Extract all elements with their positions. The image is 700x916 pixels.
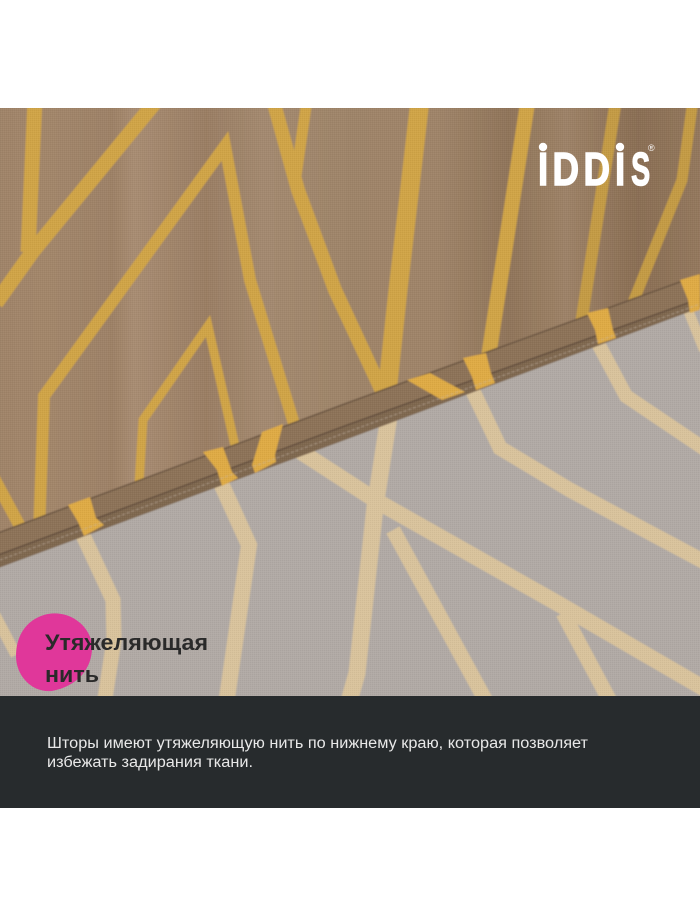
stitching <box>0 304 700 560</box>
golden pattern on brown fabric <box>0 100 693 560</box>
infographic canvas <box>0 108 700 808</box>
heading: нить <box>45 662 99 687</box>
logo: IDDIS: ® <box>648 143 655 153</box>
weighted hem band <box>0 271 700 571</box>
dark caption panel <box>0 696 700 808</box>
caption text: избежать задирания ткани. <box>47 754 253 771</box>
caption text <box>47 735 588 771</box>
curtain back: grey fabric <box>0 302 700 710</box>
heading: Утяжеляющая <box>45 630 208 655</box>
caption text: Шторы имеют утяжеляющую нить по нижнему краю, которая позволяет <box>47 735 588 752</box>
logo: IDDIS: S <box>631 144 650 196</box>
pink blob accent <box>16 613 92 691</box>
curtain front: brown fabric <box>0 108 700 532</box>
heading <box>45 630 208 687</box>
fabric weave texture <box>0 276 699 695</box>
photo: curtain fabric with weighted hem <box>0 100 700 710</box>
pale pattern on grey fabric <box>0 300 700 705</box>
golden stripes on hem <box>68 274 700 536</box>
logo: IDDIS: IDDI <box>538 143 625 195</box>
